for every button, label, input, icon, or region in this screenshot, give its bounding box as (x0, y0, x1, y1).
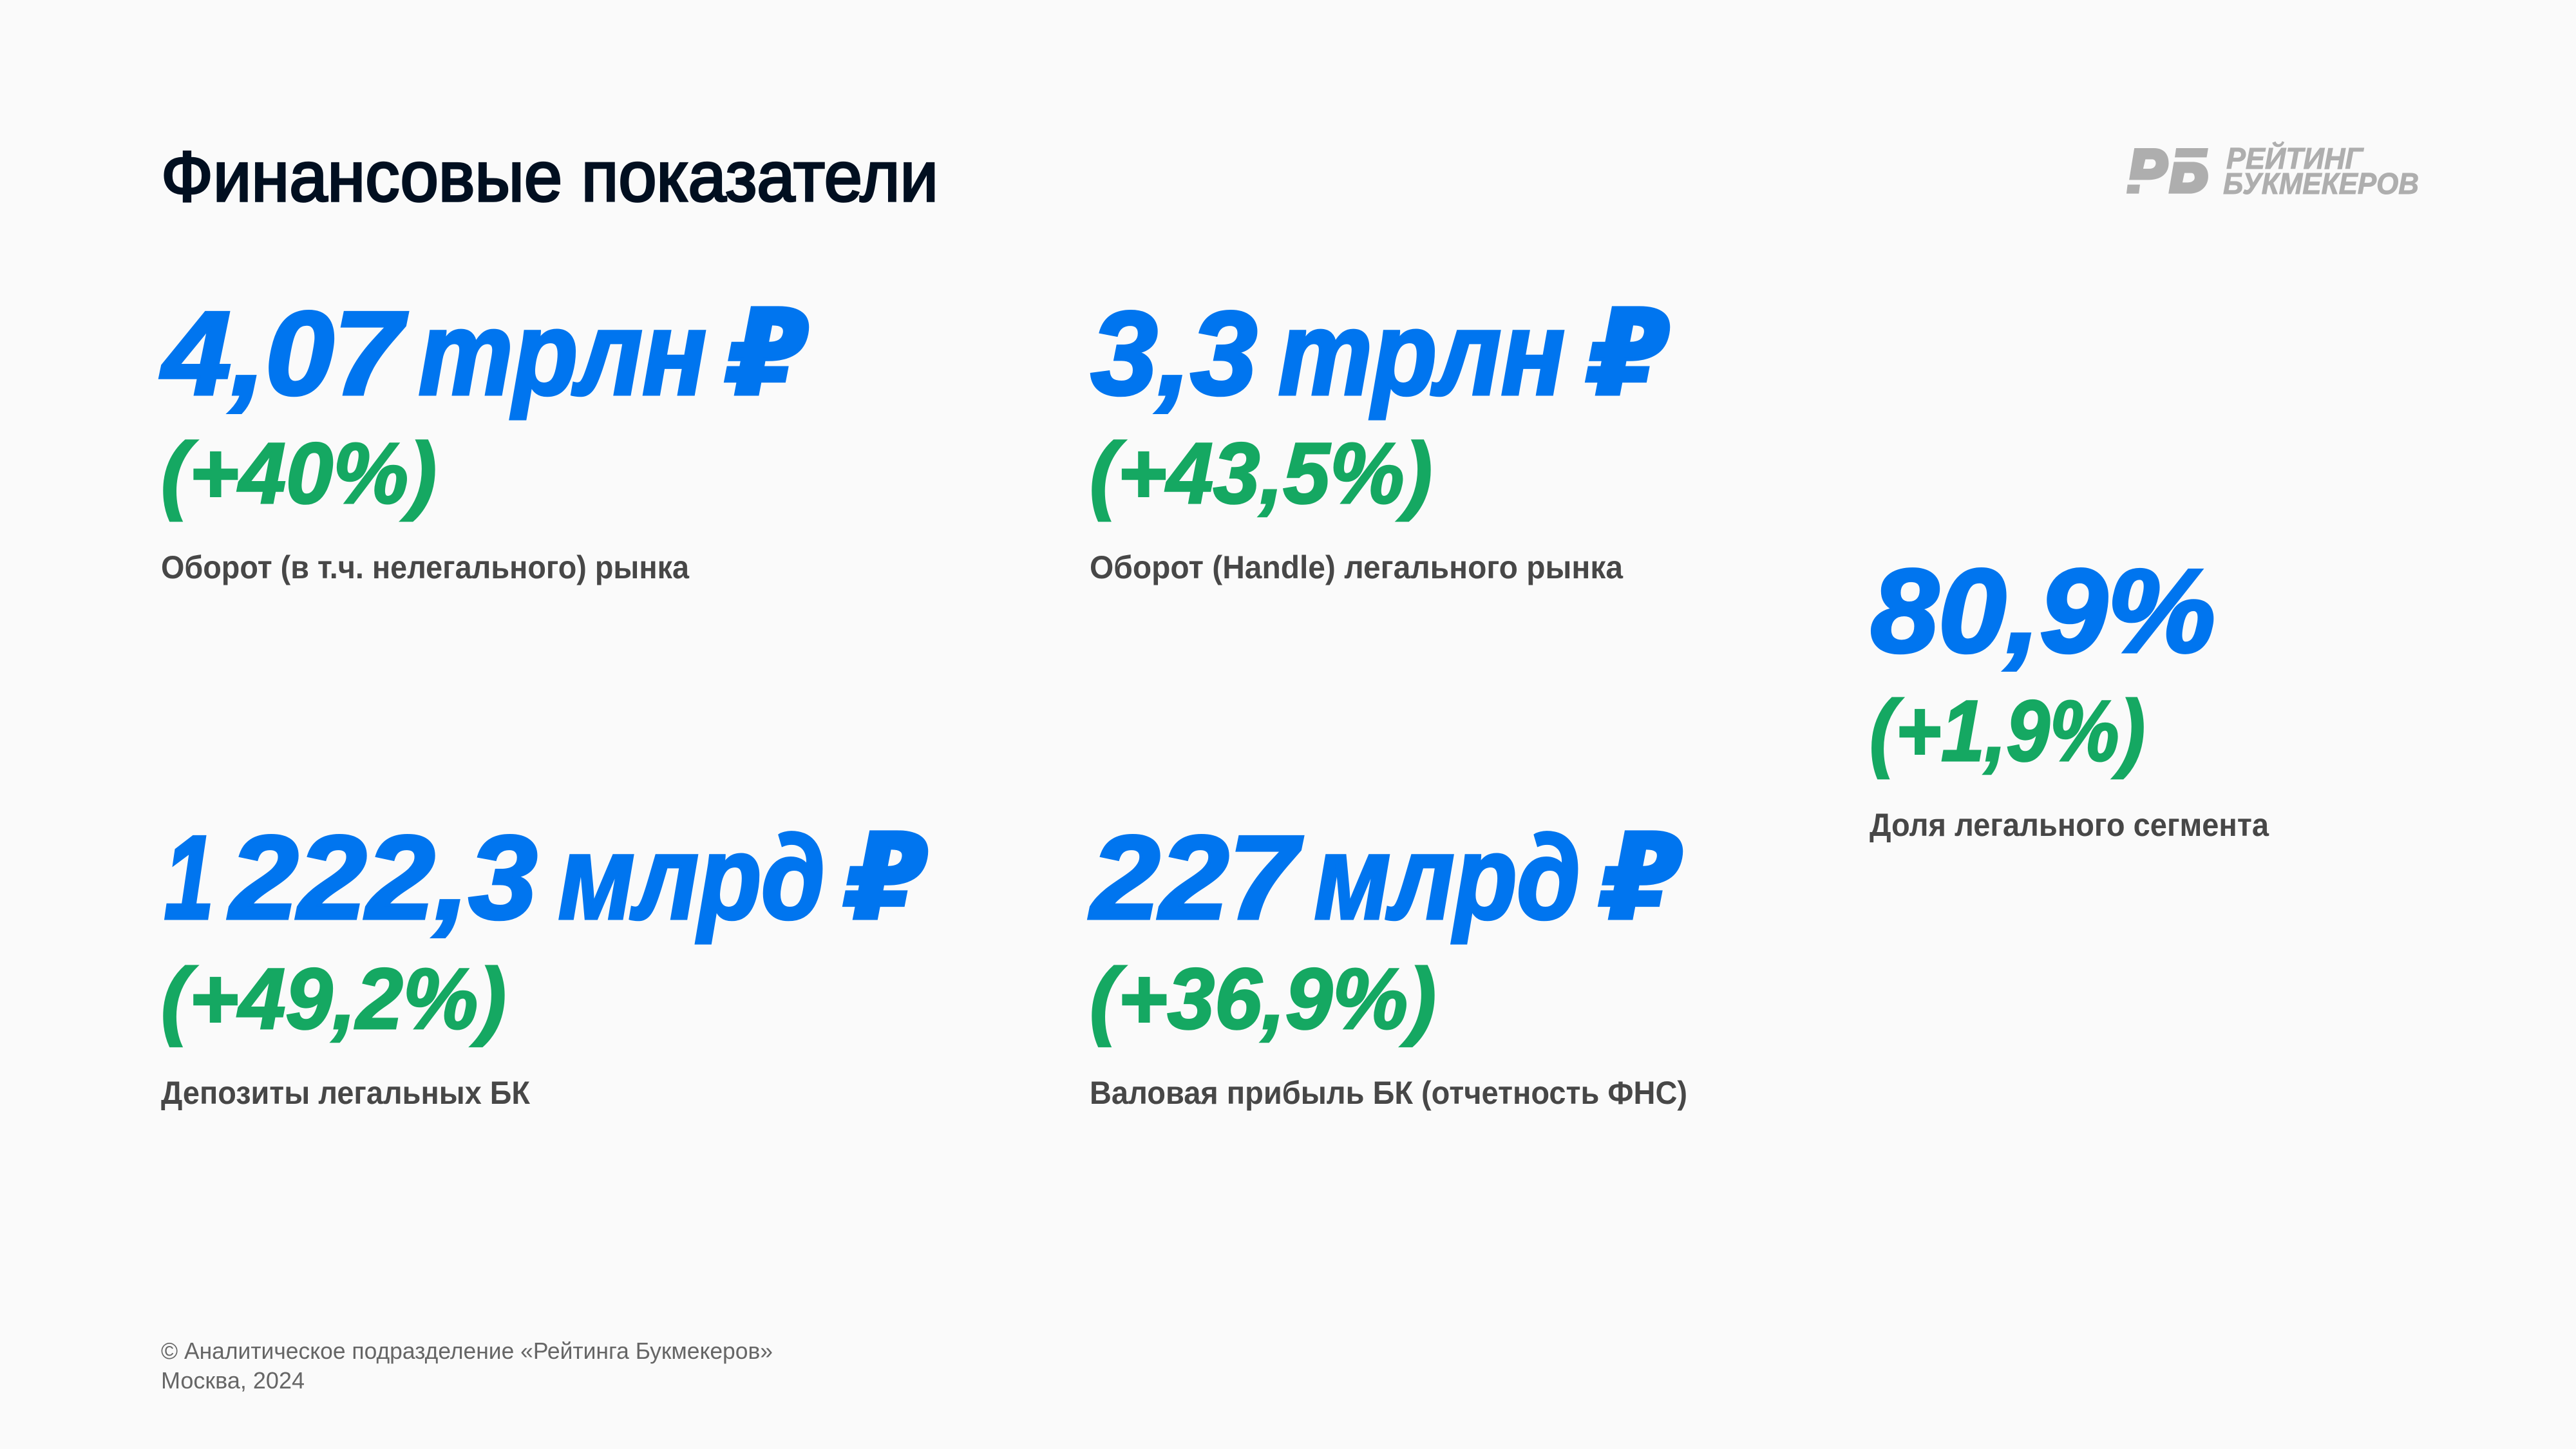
panel: gross profit (1089, 811, 1687, 1111)
value: 80,9% (1871, 544, 2215, 677)
value: млрд (558, 811, 825, 943)
value: ₽ (1586, 287, 1671, 419)
change: (+1,9%) (1870, 683, 2145, 779)
title: Финансовые показатели (161, 137, 938, 216)
value: 3,3 (1091, 287, 1257, 419)
caption: Депозиты легальных БК (161, 1075, 530, 1111)
value: ₽ (844, 811, 929, 943)
caption: Оборот (Handle) легального рынка (1090, 549, 1624, 585)
value: ₽ (1599, 811, 1683, 943)
icon: logo mark (2126, 148, 2208, 194)
value (160, 287, 810, 419)
value: 1 (164, 811, 214, 943)
panel: turnover total (160, 287, 810, 585)
panel: handle legal (1090, 287, 1671, 585)
change: (+43,5%) (1090, 426, 1432, 522)
value: 227 (1089, 811, 1303, 943)
panel: deposits (161, 811, 929, 1111)
caption: Валовая прибыль БК (отчетность ФНС) (1090, 1075, 1687, 1111)
logo text (2223, 142, 2419, 200)
panel: legal share (1870, 544, 2269, 843)
change: (+49,2%) (161, 951, 506, 1047)
value: трлн (1278, 287, 1565, 419)
value: млрд (1314, 811, 1580, 943)
value: трлн (419, 287, 706, 419)
change: (+36,9%) (1090, 951, 1436, 1047)
footer (161, 1338, 773, 1394)
logo text: БУКМЕКЕРОВ (2223, 167, 2419, 200)
value (164, 811, 929, 943)
value (1091, 287, 1671, 419)
logo: Рейтинг Букмекеров (2126, 142, 2419, 200)
caption: Доля легального сегмента (1870, 807, 2269, 843)
footer: Москва, 2024 (161, 1367, 305, 1394)
value: ₽ (725, 287, 810, 419)
value (1089, 811, 1683, 943)
caption: Оборот (в т.ч. нелегального) рынка (161, 549, 690, 585)
change: (+40%) (161, 426, 437, 522)
logo text: РЕЙТИНГ (2226, 142, 2364, 175)
value: 4,07 (160, 287, 408, 419)
value: 222,3 (228, 811, 537, 943)
footer: © Аналитическое подразделение «Рейтинга Букмекеров» (161, 1338, 773, 1364)
